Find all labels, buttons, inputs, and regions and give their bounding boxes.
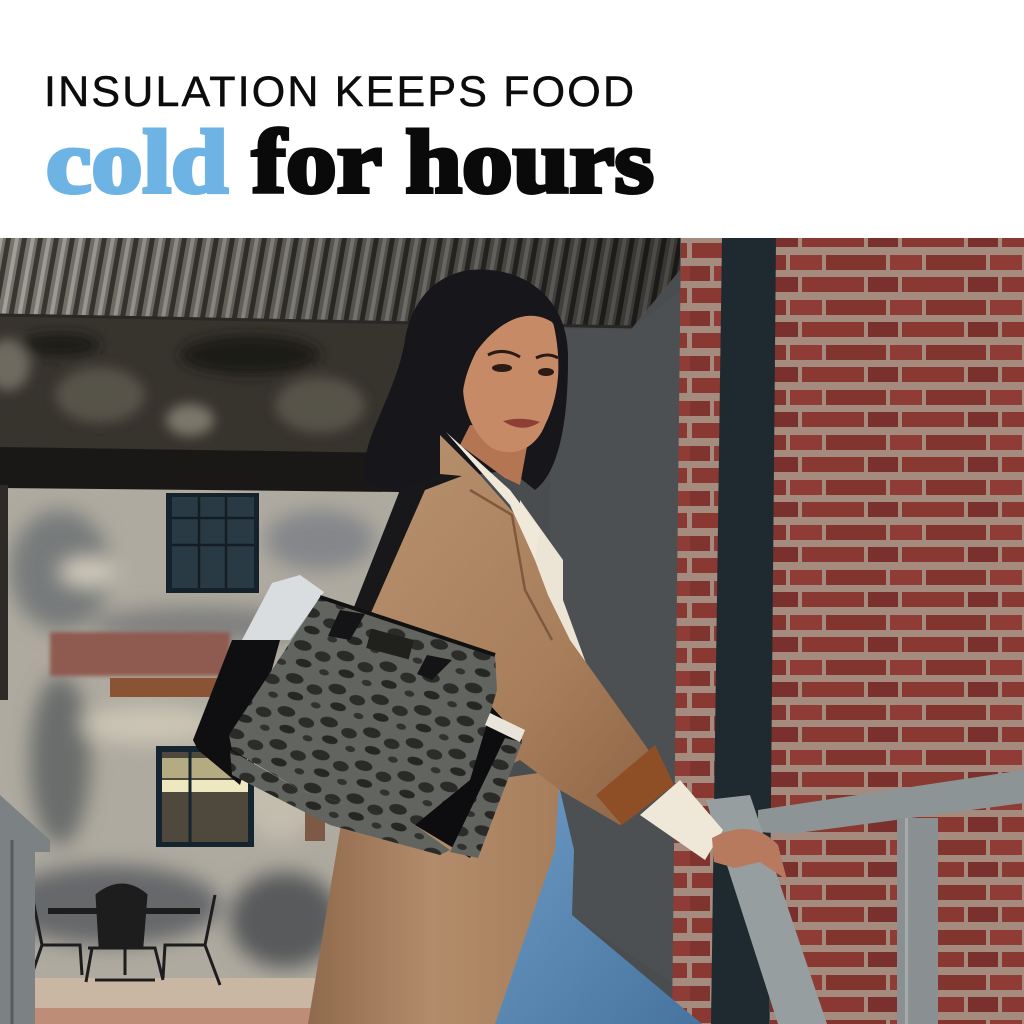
scene base	[0, 238, 1024, 1024]
black side panel right	[415, 705, 522, 858]
lower lit window	[156, 746, 254, 847]
face	[463, 313, 558, 452]
leopard front panel	[229, 597, 497, 825]
grey side wall	[550, 290, 682, 990]
eyes and mouth	[488, 351, 558, 428]
white bottle	[242, 575, 324, 640]
tote bag	[193, 474, 525, 858]
brick wall	[770, 238, 1024, 1024]
brand label	[366, 629, 414, 659]
concrete ceiling band	[0, 316, 560, 456]
coat sleeve crease	[470, 490, 552, 640]
coat cuff	[596, 745, 674, 825]
shirt cuff	[640, 780, 723, 860]
lintel	[110, 678, 221, 697]
hair fringe	[456, 303, 566, 405]
bag top edge	[320, 597, 495, 655]
corrugated roof	[0, 238, 680, 328]
upper window	[166, 493, 259, 593]
brick pier	[672, 238, 722, 1024]
black side panel left	[193, 640, 280, 785]
heading word: cold: cold	[46, 113, 228, 212]
dark pole	[711, 238, 776, 1024]
ground	[28, 978, 318, 1024]
strap tab left	[328, 610, 365, 640]
title	[44, 68, 654, 212]
coat lower	[308, 770, 560, 1024]
rail diagonal	[706, 795, 827, 1024]
photo scene	[0, 238, 1024, 1024]
hair back	[364, 270, 568, 495]
leopard bottom band	[230, 750, 450, 855]
bag strap	[352, 474, 462, 615]
coat upper	[360, 435, 672, 825]
shirt collar	[446, 432, 540, 560]
jeans	[495, 780, 702, 1024]
heading words: for hours: for hours	[252, 113, 654, 212]
shirt	[520, 500, 594, 700]
hand	[712, 829, 787, 880]
small sign	[305, 812, 325, 841]
left railing	[0, 795, 50, 1024]
rail post	[897, 818, 938, 1024]
neck	[460, 425, 530, 485]
concrete back building	[0, 485, 400, 980]
rail top	[758, 770, 1024, 834]
woman	[308, 270, 787, 1024]
heading line one: INSULATION KEEPS FOOD	[44, 68, 634, 116]
patio table and chairs	[30, 885, 220, 985]
dark beam	[0, 447, 400, 492]
leopard pocket right	[450, 738, 522, 858]
brick patch	[50, 632, 230, 676]
strap tab right	[417, 655, 452, 680]
white tag at pocket	[485, 713, 525, 742]
metal stair railing	[706, 770, 1024, 1024]
white header background	[0, 0, 1024, 238]
